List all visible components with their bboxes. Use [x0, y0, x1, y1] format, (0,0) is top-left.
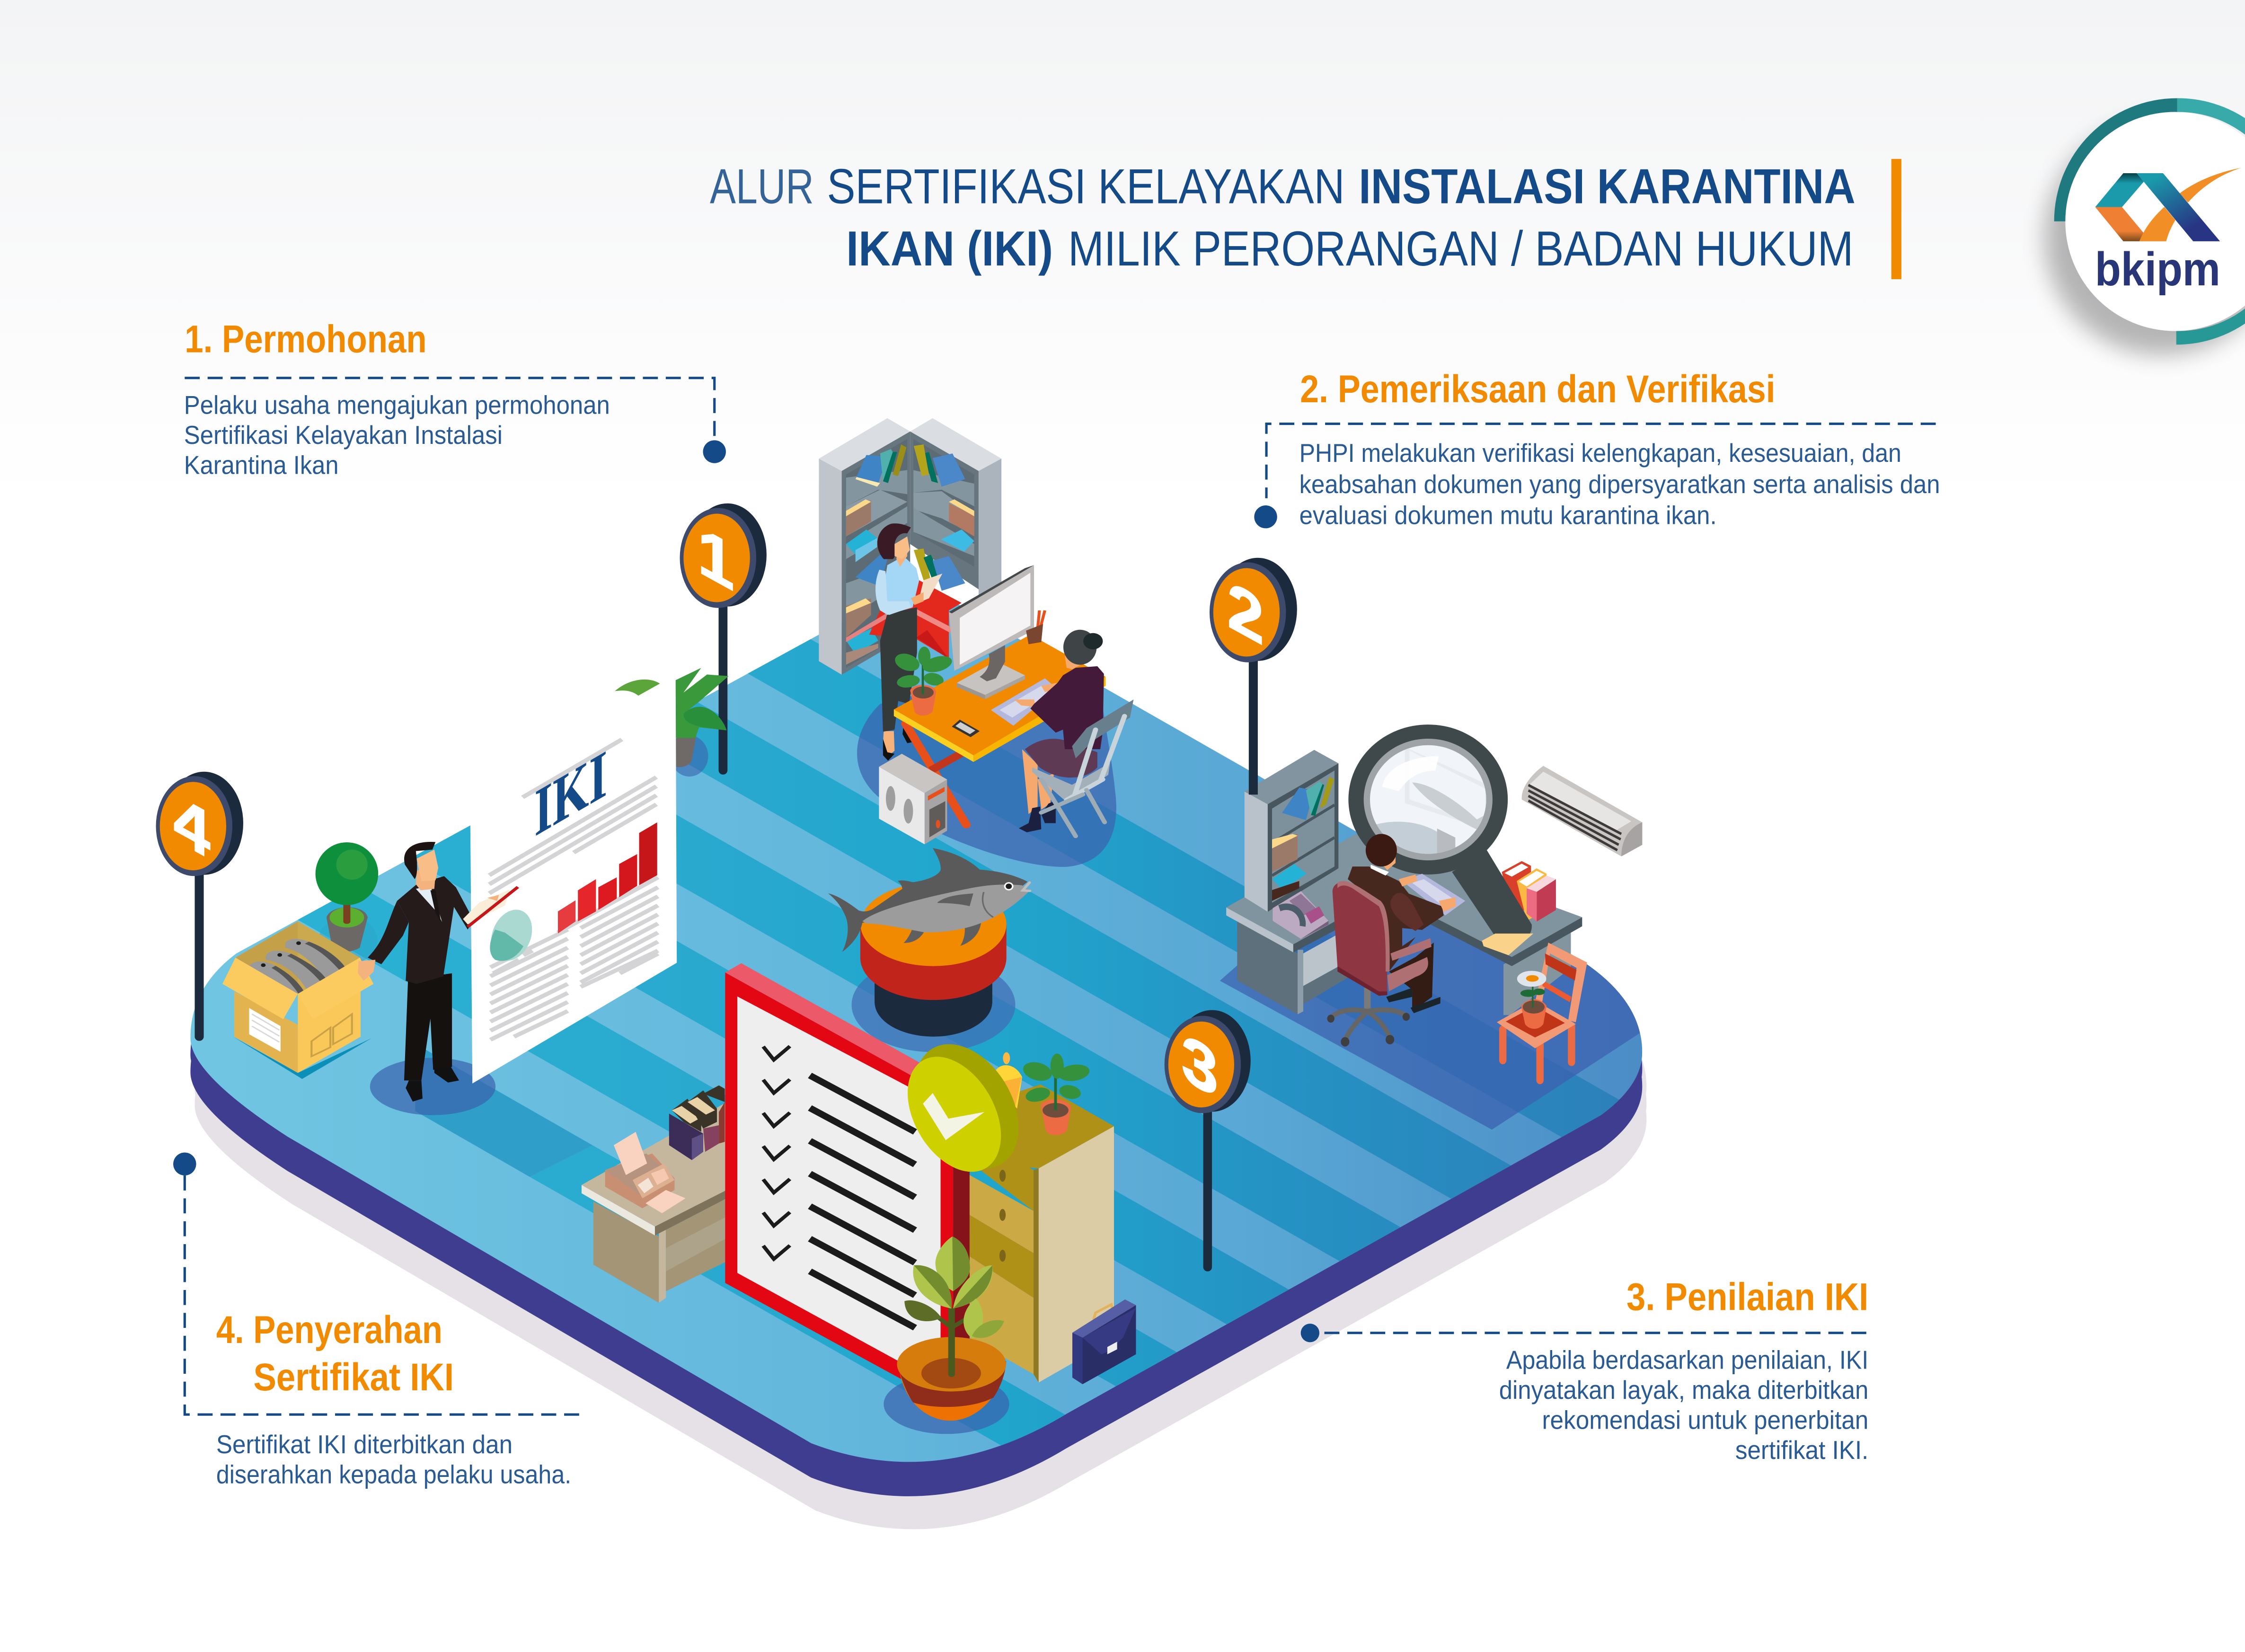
briefcase: [1072, 1299, 1136, 1384]
podium shadow and fish on podium: [828, 848, 1030, 1052]
telephone: [1273, 891, 1328, 939]
step 4 callout: diserahkan kepada pelaku usaha.: [216, 1460, 571, 1489]
potted tree: [316, 842, 378, 964]
title: MILIK PERORANGAN / BADAN HUKUM: [1068, 221, 1854, 276]
pencil cup: [1026, 610, 1045, 644]
step 3 callout: [1301, 1275, 1868, 1465]
step 1 callout: Sertifikasi Kelayakan Instalasi: [184, 421, 503, 450]
step 2 callout: keabsahan dokumen yang dipersyaratkan serta analisis dan: [1299, 470, 1940, 499]
phone: [952, 720, 980, 737]
step 1 callout: 1. Permohonan: [185, 318, 427, 361]
clipboard in hand: [463, 887, 518, 927]
pin 1: 1: [698, 512, 734, 605]
step 4 callout: 4. Penyerahan: [216, 1308, 442, 1352]
title: [710, 159, 1856, 276]
plant on desk: [891, 646, 955, 693]
logo: bkipm: [2044, 98, 2245, 355]
step 3 callout: Apabila berdasarkan penilaian, IKI: [1506, 1345, 1868, 1374]
clipboard checklist: [725, 963, 970, 1407]
title accent bar: [1891, 159, 1901, 279]
green badge with check: [889, 1031, 1039, 1184]
pin 4: [156, 772, 243, 1041]
step 2 callout: PHPI melakukan verifikasi kelengkapan, kesesuaian, dan: [1299, 439, 1901, 468]
step 4 callout: Sertifikat IKI: [254, 1356, 454, 1399]
title: IKAN (IKI): [846, 221, 1053, 276]
magnifying glass: [1348, 724, 1532, 946]
pin 3: 3: [1182, 1018, 1218, 1112]
step 4 callout: [173, 1153, 587, 1489]
fax machine: [605, 1132, 686, 1213]
logo: bkipm: bkipm: [2095, 243, 2220, 296]
title: SERTIFIKASI KELAYAKAN: [827, 159, 1345, 214]
step 4 callout: Sertifikat IKI diterbitkan dan: [216, 1430, 513, 1459]
large potted plant: [897, 1237, 1006, 1421]
small plant on cabinet: [1020, 1053, 1091, 1135]
man shadow: [370, 1058, 495, 1115]
seated woman: [1014, 630, 1133, 836]
examiner bookshelf: [1245, 750, 1338, 912]
note book under magnifier: [1482, 934, 1533, 955]
step 3 callout: 3. Penilaian IKI: [1626, 1275, 1868, 1318]
pot shadow: [884, 1374, 1009, 1434]
box of fish: [222, 921, 373, 1079]
step 3 callout: dinyatakan layak, maka diterbitkan: [1499, 1376, 1868, 1405]
potted plant pot: [910, 674, 936, 716]
desk 1 shadow: [857, 674, 1116, 867]
binders on desk: [1502, 861, 1556, 921]
monitor: [949, 565, 1034, 699]
step 1 callout: Karantina Ikan: [184, 451, 339, 479]
scene: examination desk with magnifier: [1226, 724, 1642, 1080]
small red chair with flower: [1497, 943, 1587, 1080]
computer tower: [879, 754, 947, 844]
scene: bookshelf with two women at desk: [819, 418, 1133, 844]
man in suit: [358, 842, 483, 1102]
pin 3: [1165, 1010, 1251, 1272]
binders: [669, 1086, 725, 1160]
standing woman: [875, 523, 942, 761]
pin 2: [1210, 558, 1297, 795]
seated examiner: [1348, 834, 1456, 1013]
bookshelf: [819, 418, 1001, 675]
step 2 callout: evaluasi dokumen mutu karantina ikan.: [1299, 501, 1717, 530]
air conditioner: [1522, 766, 1642, 857]
keyboard on examiner desk: [1402, 874, 1465, 915]
document IKI: [470, 678, 677, 1084]
examiner desk: [1226, 834, 1582, 1015]
pin 1: [680, 504, 767, 775]
beige desk: [582, 1102, 727, 1303]
podium shadow: [852, 957, 1015, 1052]
scene: checklist, cabinet and plant: [582, 963, 1136, 1434]
red shelf behind woman: [846, 579, 962, 659]
trophy: [995, 1052, 1022, 1109]
step 1 callout: Pelaku usaha mengajukan permohonan: [184, 390, 610, 419]
pin 2: 2: [1227, 566, 1264, 660]
platform base: [190, 605, 1647, 1529]
scene: handover with document and box: [222, 668, 729, 1115]
tuna fish: [828, 848, 1030, 952]
keyboard: [991, 678, 1058, 726]
step 3 callout: sertifikat IKI.: [1735, 1436, 1868, 1465]
step 2 callout: 2. Pemeriksaan dan Verifikasi: [1300, 368, 1776, 411]
filing cabinet: [970, 1085, 1114, 1383]
step 3 callout: rekomendasi untuk penerbitan: [1542, 1405, 1868, 1434]
title: INSTALASI KARANTINA: [1359, 159, 1856, 214]
pin 4: 4: [174, 779, 210, 873]
step 2 callout: [1254, 368, 1940, 530]
orange desk: [894, 635, 1106, 825]
step 1 callout: [184, 318, 726, 479]
document label IKI: IKI: [534, 734, 607, 851]
title: ALUR: [710, 159, 814, 214]
podium: [860, 883, 1007, 1037]
office chair: [1327, 881, 1432, 1046]
plant behind document: [671, 668, 729, 777]
